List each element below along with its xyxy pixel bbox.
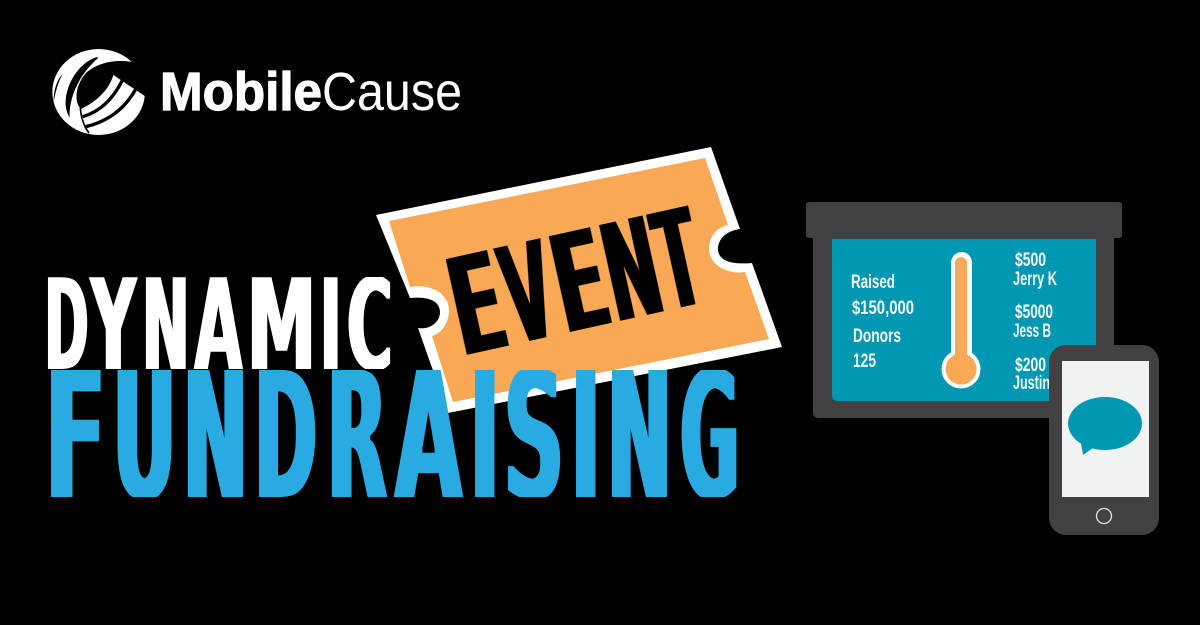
raised and donors totals: 125 <box>853 351 876 372</box>
heading: DYNAMIC <box>48 277 390 369</box>
ticket white border <box>376 147 782 413</box>
ticket orange face <box>389 158 769 402</box>
logo wordmark: Cause <box>322 62 462 122</box>
display screen with fundraising thermometer <box>806 202 1122 418</box>
text: C <box>347 250 393 402</box>
icon: speech bubble <box>1068 397 1142 455</box>
heading: FUNDRAISING: R <box>327 333 387 542</box>
heading: FUNDRAISING: U <box>113 333 176 542</box>
heading: DYNAMIC: A <box>194 250 242 402</box>
icon: smartphone with message bubble <box>1049 345 1159 535</box>
donor list: $200 <box>1015 355 1046 376</box>
phone body <box>1049 345 1159 535</box>
heading: FUNDRAISING: S <box>504 333 564 542</box>
raised and donors totals <box>851 272 914 372</box>
ticket label: EVENT: V <box>488 210 568 379</box>
ticket label: EVENT: N <box>589 186 675 357</box>
screen housing body <box>813 230 1114 418</box>
ticket with EVENT <box>376 147 782 413</box>
icon: thermometer <box>942 252 980 388</box>
logo wordmark <box>160 62 462 122</box>
heading: FUNDRAISING: N <box>184 333 248 542</box>
icon: striped globe <box>52 49 158 135</box>
screen housing top bar <box>806 202 1122 238</box>
donor list: $500 <box>1015 250 1046 271</box>
logo: MobileCause <box>52 49 462 135</box>
heading: FUNDRAISING: D <box>255 333 317 542</box>
heading: DYNAMIC: N <box>142 250 189 402</box>
ticket label: EVENT: T <box>641 177 715 345</box>
heading: DYNAMIC: D <box>45 250 88 402</box>
heading: FUNDRAISING <box>50 370 736 497</box>
raised and donors totals: Donors <box>853 326 901 347</box>
donor list: Justin <box>1013 373 1050 394</box>
heading: DYNAMIC: I <box>320 250 341 402</box>
raised and donors totals: Raised <box>851 272 895 293</box>
text: G <box>680 333 739 542</box>
logo wordmark: Mobile <box>160 62 322 122</box>
donor list: Jess B <box>1013 321 1051 342</box>
heading: FUNDRAISING: I <box>572 333 600 542</box>
heading: FUNDRAISING: A <box>395 333 462 542</box>
donor list: $5000 <box>1015 302 1053 323</box>
heading: FUNDRAISING: F <box>45 333 106 542</box>
heading: FUNDRAISING: I <box>470 333 499 542</box>
donor list: Jerry K <box>1013 269 1057 290</box>
donor list <box>1013 250 1057 394</box>
teal display <box>832 239 1096 401</box>
heading: FUNDRAISING: N <box>608 333 672 542</box>
raised and donors totals: $150,000 <box>852 298 914 319</box>
phone home button <box>1096 508 1112 524</box>
ticket label: EVENT <box>435 177 715 391</box>
heading: DYNAMIC: M <box>247 250 316 402</box>
ticket label: EVENT: E <box>538 198 623 368</box>
phone screen <box>1062 361 1149 497</box>
heading: DYNAMIC: Y <box>89 250 138 402</box>
ticket label: EVENT: E <box>435 221 520 391</box>
